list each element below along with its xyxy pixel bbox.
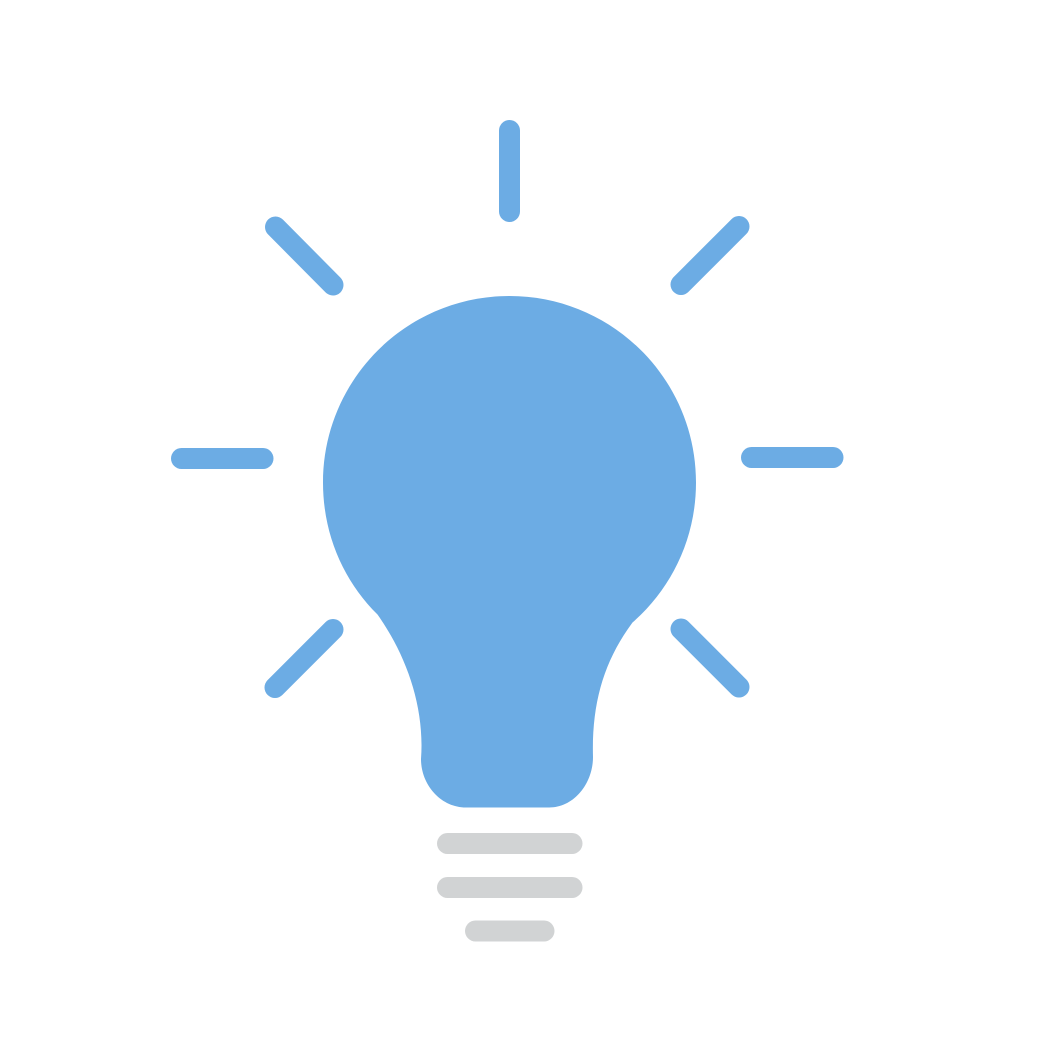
ray: left — [182, 448, 263, 469]
ray: upper left — [276, 227, 333, 285]
ray: lower left — [275, 630, 333, 688]
bulb glass body — [323, 296, 696, 808]
ray: top — [499, 130, 520, 212]
light rays — [182, 130, 833, 688]
ray: lower right — [681, 629, 739, 687]
base bar: middle — [448, 877, 572, 898]
ray: upper right — [681, 226, 739, 284]
base bar: bottom — [476, 920, 544, 942]
base bar: top — [448, 833, 572, 854]
bulb screw base — [448, 844, 572, 931]
ray: right — [752, 447, 833, 468]
